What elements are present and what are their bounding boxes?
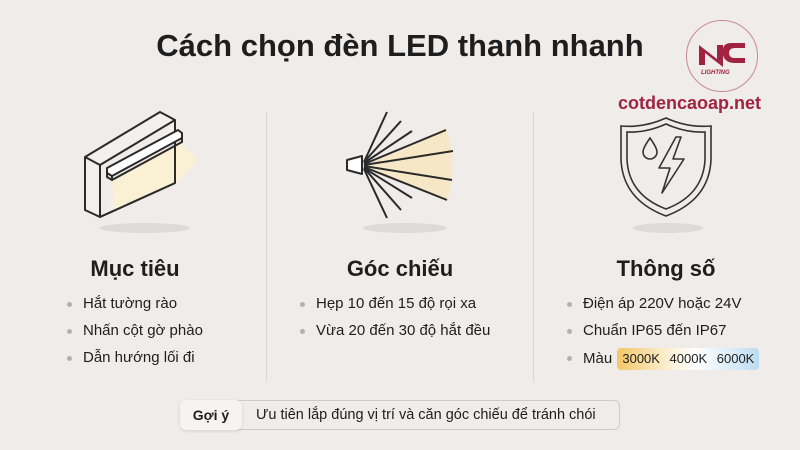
logo — [686, 20, 758, 92]
list: goc chieu: Hẹp 10 đến 15 độ rọi xa — [316, 295, 476, 312]
list: thong so: Màu — [583, 350, 612, 367]
heading: Mục tiêu: Mục tiêu — [90, 256, 180, 281]
icon: shield — [621, 118, 711, 233]
tip text: Ưu tiên lắp đúng vị trí và căn góc chiếu để tránh chói — [256, 407, 596, 423]
list: thong so: Điện áp 220V hoặc 24V — [583, 295, 741, 312]
list: muc tieu — [67, 295, 203, 366]
heading: Góc chiếu: Góc chiếu — [347, 256, 453, 281]
title: Cách chọn đèn LED thanh nhanh — [156, 28, 644, 63]
list: thong so: 3000K 4000K 6000K — [622, 351, 754, 366]
list: muc tieu: Dẫn hướng lối đi — [83, 349, 195, 366]
tip box — [180, 400, 620, 430]
tip label — [180, 400, 242, 430]
list: muc tieu: Hắt tường rào — [83, 295, 177, 312]
logo: LIGHTING — [701, 70, 730, 76]
url: cotdencaoap.net — [618, 93, 761, 113]
tip label: Gợi ý — [193, 407, 229, 423]
heading: Thông số: Thông số — [616, 256, 715, 281]
list: thong so — [567, 295, 759, 370]
list: muc tieu: Nhấn cột gờ phào — [83, 322, 203, 339]
list: thong so: Chuẩn IP65 đến IP67 — [583, 322, 726, 339]
list: goc chieu: Vừa 20 đến 30 độ hắt đều — [316, 322, 490, 339]
icon: beam angle — [347, 112, 453, 233]
list: goc chieu — [300, 295, 490, 339]
icon: wall light — [85, 112, 198, 233]
